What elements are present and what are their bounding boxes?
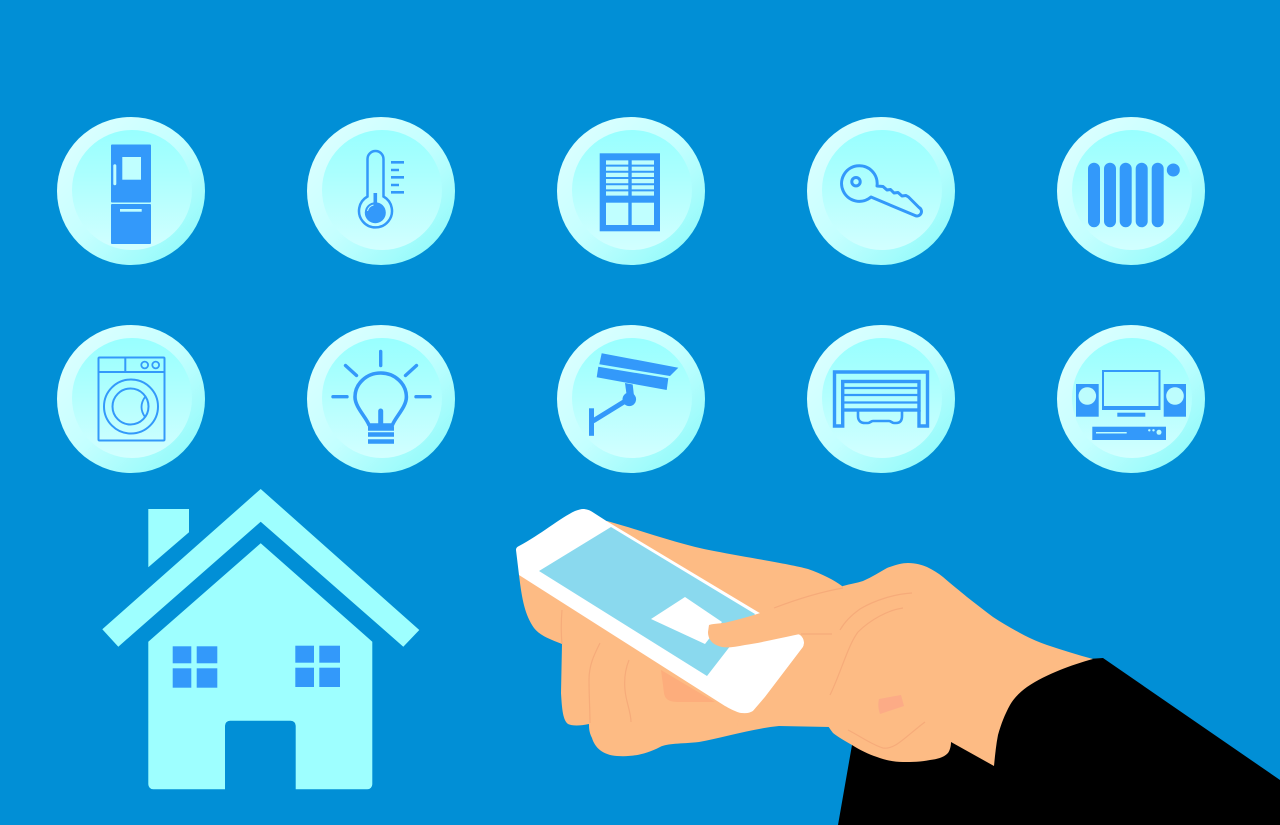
right window bbox=[295, 646, 340, 687]
house body bbox=[148, 543, 372, 789]
thumb and back of hand bbox=[708, 563, 1093, 766]
icon: home entertainment system bbox=[1057, 325, 1205, 473]
skin creases bbox=[561, 588, 925, 748]
icon: garage door bbox=[807, 325, 955, 473]
left window bbox=[173, 646, 217, 688]
hand holding smartphone bbox=[516, 509, 1280, 825]
icon: key bbox=[807, 117, 955, 265]
app tile on screen bbox=[651, 597, 722, 644]
house bbox=[102, 489, 419, 789]
icon: window shutters bbox=[557, 117, 705, 265]
icon: thermometer bbox=[307, 117, 455, 265]
roof bbox=[102, 489, 419, 647]
icon: light bulb bbox=[307, 325, 455, 473]
icon: refrigerator bbox=[57, 117, 205, 265]
black sleeve bbox=[838, 658, 1280, 825]
smartphone body bbox=[516, 509, 804, 713]
chimney bbox=[148, 509, 189, 567]
palm shadow bbox=[661, 670, 715, 702]
phone screen bbox=[539, 527, 755, 676]
icon: security camera bbox=[557, 325, 705, 473]
icon: washing machine bbox=[57, 325, 205, 473]
wrist knuckle patch bbox=[878, 695, 904, 714]
hand behind phone bbox=[519, 521, 842, 756]
icon: radiator bbox=[1057, 117, 1205, 265]
